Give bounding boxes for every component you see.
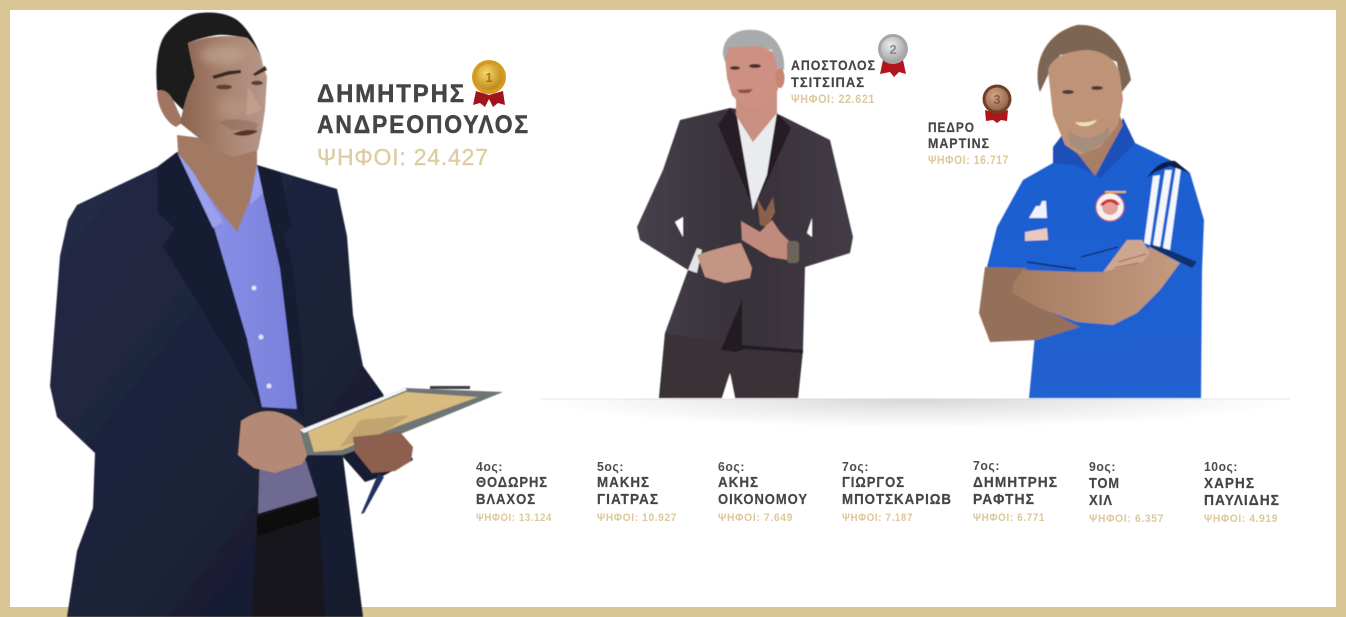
- rank 5: ΨΗΦΟΙ: 10.927: [597, 512, 677, 524]
- rank 7 Raftis: 7ος:: [973, 458, 1000, 473]
- rank 7 Raftis: ΨΗΦΟΙ: 6.771: [973, 512, 1045, 524]
- winner name: ΑΝΔΡΕΟΠΟΥΛΟΣ: [317, 111, 530, 139]
- icon: bronze medal: 3: [993, 92, 1001, 107]
- finger lines: [1114, 254, 1146, 268]
- lapels: [718, 108, 791, 210]
- podium shadow: [540, 398, 1290, 428]
- rank 6: ΨΗΦΟΙ: 7.649: [718, 512, 793, 524]
- rank 4: ΘΟΔΩΡΗΣ: [476, 474, 548, 491]
- rank 7 Botskarioov: [842, 459, 952, 524]
- sponsor patch: [1025, 228, 1048, 241]
- rank 4: 4ος:: [476, 459, 503, 474]
- rank 6: [718, 459, 808, 524]
- trophy: [757, 197, 775, 227]
- rank 4: ΨΗΦΟΙ: 13.124: [476, 512, 552, 524]
- shoulder panel: [1147, 161, 1190, 178]
- rank 9: [1089, 459, 1164, 525]
- shirt: [177, 152, 297, 409]
- rank 10: ΨΗΦΟΙ: 4.919: [1204, 513, 1278, 525]
- rank 10: ΠΑΥΛΙΔΗΣ: [1204, 492, 1280, 509]
- chest seam: [1081, 247, 1118, 257]
- third place text: ΨΗΦΟΙ: 16.717: [928, 153, 1009, 167]
- winner votes: ΨΗΦΟΙ: 24.427: [317, 144, 488, 170]
- rank 7 Botskarioov: ΜΠΟΤΣΚΑΡΙΩΒ: [842, 491, 952, 508]
- rank 10: [1204, 459, 1280, 525]
- hair: [1038, 25, 1131, 92]
- rank 7 Raftis: ΡΑΦΤΗΣ: [973, 491, 1035, 508]
- right hand: [353, 432, 413, 473]
- jacket: [50, 152, 413, 617]
- rank 9: ΨΗΦΟΙ: 6.357: [1089, 513, 1164, 525]
- eyes and smile: [1062, 86, 1110, 153]
- rank 5: [597, 459, 677, 524]
- suit: [637, 108, 853, 398]
- rank 10: 10ος:: [1204, 459, 1238, 474]
- lower shirt: [258, 450, 317, 516]
- rank 5: ΓΙΑΤΡΑΣ: [597, 491, 659, 508]
- shirt collar: [177, 152, 264, 228]
- face: [1048, 50, 1123, 155]
- winner name: [317, 80, 530, 139]
- sleeve hem: [1150, 243, 1197, 268]
- rank 9: ΧΙΛ: [1089, 492, 1113, 509]
- rank 10: ΧΑΡΗΣ: [1204, 475, 1255, 492]
- gaps beside torso: [675, 217, 812, 237]
- blue polo: [987, 118, 1204, 398]
- rank 6: ΟΙΚΟΝΟΜΟΥ: [718, 491, 808, 508]
- trousers: [659, 333, 803, 398]
- rank 6: ΑΚΗΣ: [718, 474, 759, 491]
- forearm: [1013, 247, 1180, 325]
- ear: [157, 90, 183, 127]
- figure: second place coach: [637, 30, 853, 398]
- adidas mark: [1029, 201, 1047, 218]
- rank 4: [476, 459, 552, 524]
- third place text: ΠΕΔΡΟ: [928, 119, 975, 135]
- winner name: ΔΗΜΗΤΡΗΣ: [317, 80, 466, 108]
- right hand: [741, 220, 793, 260]
- rank 9: 9ος:: [1089, 459, 1116, 474]
- shirt: [737, 113, 777, 210]
- second place text: ΤΣΙΤΣΙΠΑΣ: [791, 74, 865, 90]
- shirt buttons: [252, 286, 280, 490]
- cheek highlight: [216, 98, 248, 118]
- rank 5: ΜΑΚΗΣ: [597, 474, 650, 491]
- second place text: [791, 57, 876, 106]
- second place text: ΨΗΦΟΙ: 22.621: [791, 92, 875, 106]
- second place text: ΑΠΟΣΤΟΛΟΣ: [791, 57, 876, 73]
- hand: [1103, 240, 1150, 272]
- forehead highlight: [200, 45, 244, 65]
- neck: [1063, 100, 1123, 176]
- ear: [776, 68, 784, 88]
- gap between legs: [722, 373, 735, 398]
- icon: gold medal: 1: [485, 70, 493, 85]
- third place text: [928, 119, 1009, 167]
- clipboard: [300, 386, 503, 455]
- icon: gold medal: [472, 60, 506, 107]
- shirt cuff: [688, 248, 702, 273]
- left hand: [238, 411, 317, 473]
- rank 7 Raftis: [973, 458, 1058, 524]
- belt and trousers: [252, 496, 325, 617]
- rank 6: 6ος:: [718, 459, 745, 474]
- club badge: [1096, 191, 1126, 221]
- lapels: [157, 152, 260, 407]
- white sleeve stripes: [1144, 166, 1181, 250]
- rank 9: ΤΟΜ: [1089, 475, 1120, 492]
- rank 7 Botskarioov: ΨΗΦΟΙ: 7.187: [842, 512, 913, 524]
- watch: [787, 241, 799, 263]
- figure: first place coach: [50, 12, 503, 617]
- collar: [1053, 118, 1135, 178]
- neck: [736, 85, 777, 142]
- neck: [177, 135, 257, 232]
- face: [180, 36, 267, 157]
- pen: [361, 474, 384, 514]
- under arm: [979, 267, 1080, 342]
- rank 7 Botskarioov: 7ος:: [842, 459, 869, 474]
- icon: silver medal: [878, 34, 908, 77]
- hair: [723, 30, 784, 70]
- hair: [156, 12, 263, 110]
- left hand: [697, 243, 752, 283]
- rank 5: 5ος:: [597, 459, 624, 474]
- icon: bronze medal: [982, 84, 1012, 123]
- eyes and mouth: [730, 64, 761, 93]
- rank 7 Botskarioov: ΓΙΩΡΓΟΣ: [842, 474, 905, 491]
- eyes, brows and mouth: [212, 66, 267, 136]
- icon: silver medal: 2: [889, 42, 897, 57]
- third place text: ΜΑΡΤΙΝΣ: [928, 135, 990, 151]
- face: [725, 46, 778, 110]
- rank 4: ΒΛΑΧΟΣ: [476, 491, 536, 508]
- figure: third place coach: [979, 25, 1204, 398]
- rank 7 Raftis: ΔΗΜΗΤΡΗΣ: [973, 474, 1058, 491]
